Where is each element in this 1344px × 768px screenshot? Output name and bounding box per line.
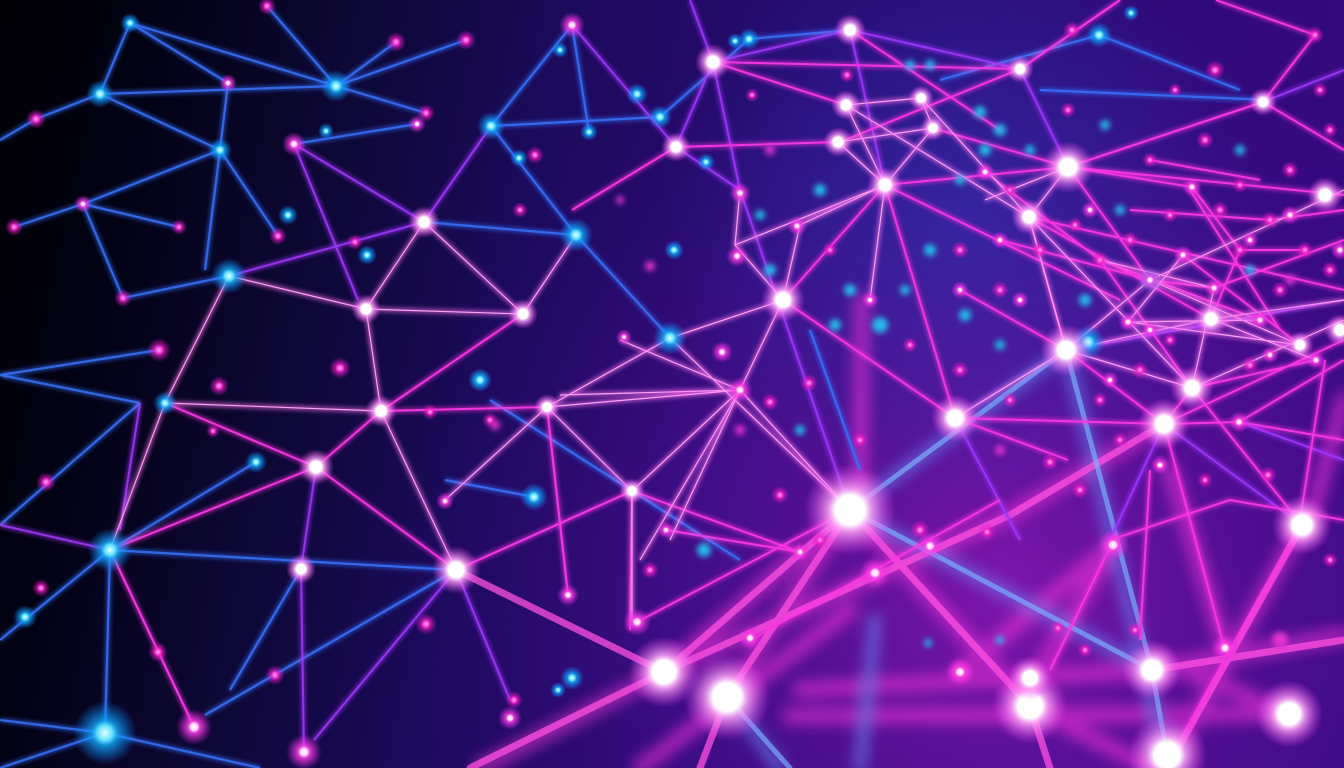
nodes: large white hubs <box>286 14 1344 768</box>
edges: thin bright filaments <box>110 98 1344 622</box>
out-of-focus background particles <box>475 60 1295 680</box>
thick blurred foreground beams <box>456 300 1344 768</box>
